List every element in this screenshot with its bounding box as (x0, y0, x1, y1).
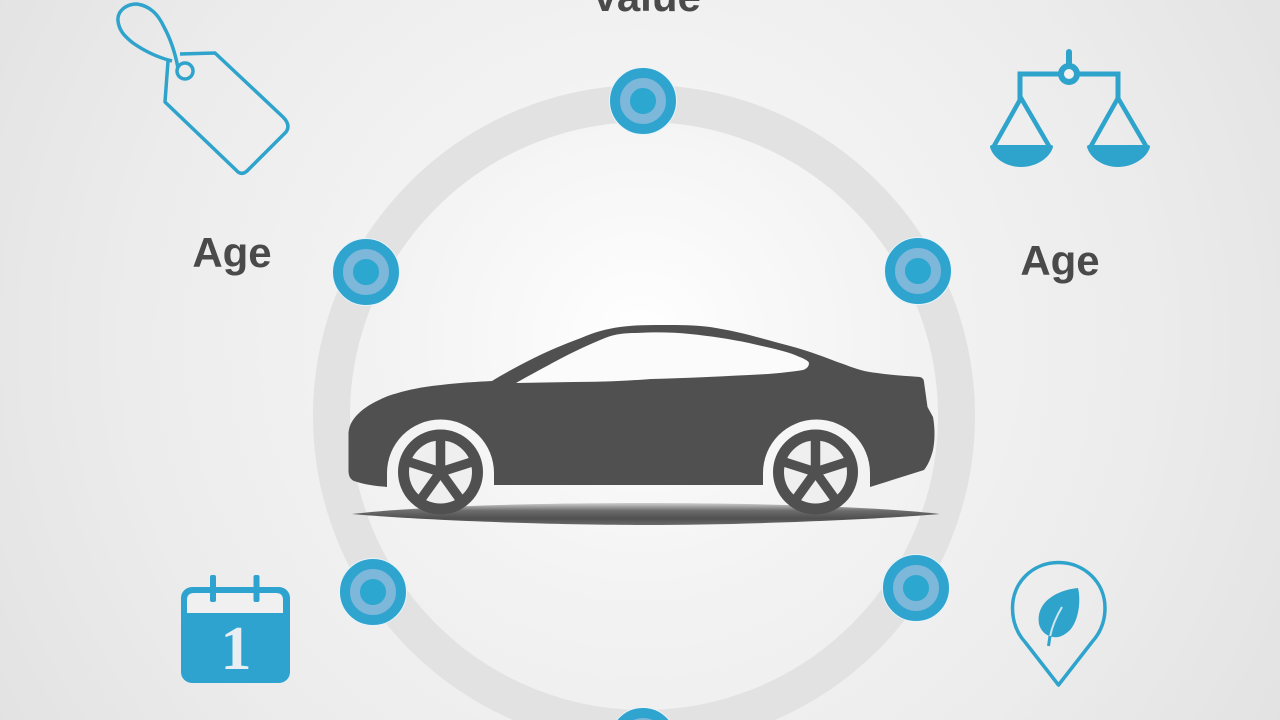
car illustration (348, 325, 934, 509)
node: lower right (882, 554, 950, 622)
node: lower left (340, 558, 406, 626)
car body (348, 325, 934, 487)
node: upper left (332, 238, 400, 306)
front wheel (403, 433, 478, 509)
rear wheel (778, 433, 853, 509)
icon: balance scale (990, 52, 1150, 167)
node: bottom (610, 708, 676, 720)
node: upper right (884, 238, 952, 304)
label: Age left: Age (192, 229, 272, 276)
icon: calendar: 1 (220, 615, 252, 683)
ring (332, 104, 956, 720)
label: Age right: Age (1020, 237, 1100, 284)
car shadow (352, 503, 940, 525)
car window (516, 332, 809, 383)
node: top (610, 68, 676, 134)
icon: leaf pin (1012, 562, 1105, 685)
icon: calendar (181, 575, 290, 683)
icon: price tag (118, 4, 288, 173)
